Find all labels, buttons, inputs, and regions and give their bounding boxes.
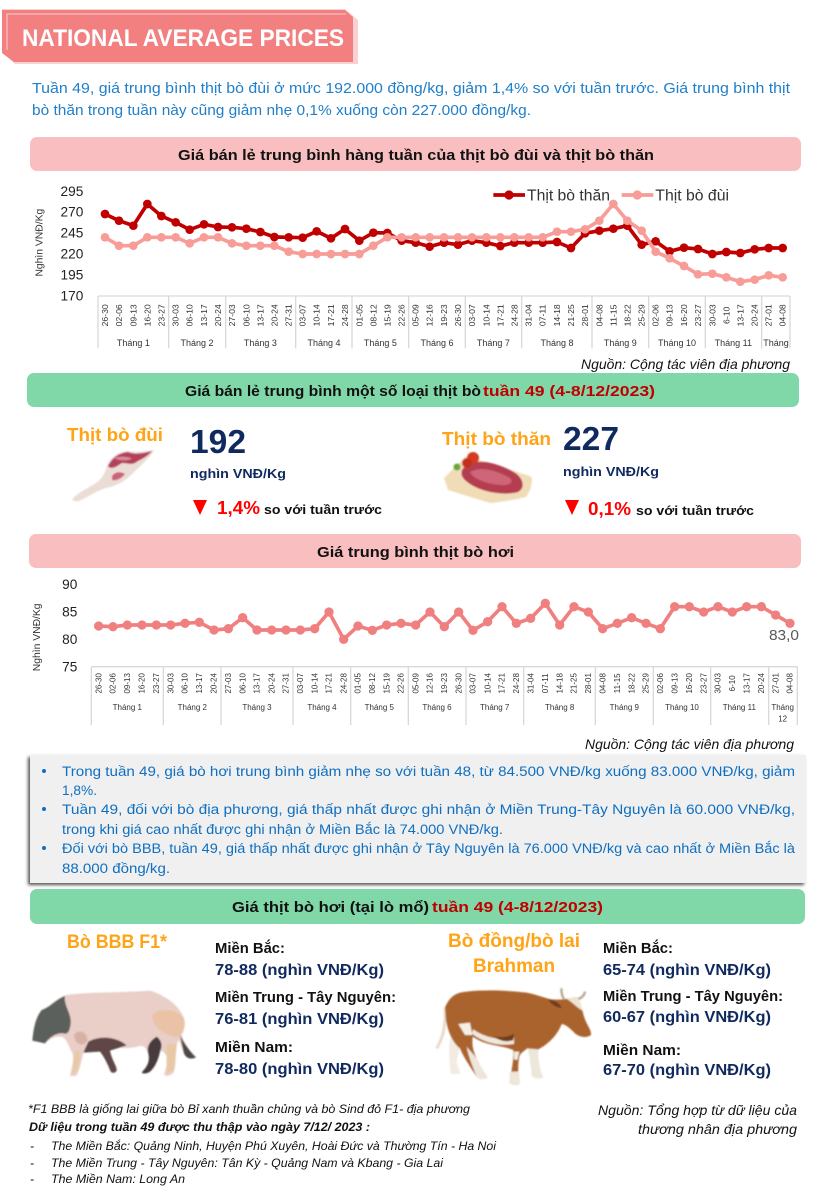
breed name <box>448 931 580 977</box>
week labels: 07-11 <box>538 304 548 326</box>
y axis values: 195 <box>61 268 84 283</box>
data label: last value: 83,0 <box>769 628 799 644</box>
month labels: 12 <box>778 715 788 724</box>
panel: thịt bò thăn price: 0,1% <box>588 499 631 519</box>
series: thịt bò thăn <box>105 204 783 254</box>
week labels <box>100 304 788 326</box>
intro text: Tuần 49, giá trung bình thịt bò đùi ở mức 192.000 đồng/kg, giảm 1,4% so với tuần trước. Giá trung bình thịt <box>32 81 790 97</box>
week labels: 15-19 <box>382 304 392 326</box>
week labels: 30-03 <box>707 304 717 326</box>
source note: live cattle chart: Nguồn: Cộng tác viên địa phương <box>585 736 794 752</box>
line chart: live cattle prices <box>32 577 799 725</box>
week labels: 23-27 <box>699 673 708 694</box>
month labels: Tháng <box>763 338 789 348</box>
week labels: 10-14 <box>312 304 322 326</box>
week labels: 09-13 <box>670 673 679 694</box>
icon: brown cow <box>437 988 591 1085</box>
week labels: 06-10 <box>241 304 251 326</box>
y axis values: 85 <box>62 605 78 620</box>
week labels: 30-03 <box>166 673 175 694</box>
panel: thịt bò thăn price <box>442 420 754 519</box>
heading: weekly retail price chart <box>30 137 801 171</box>
week labels: 03-07 <box>298 304 308 326</box>
week labels: 27-03 <box>224 673 233 694</box>
title banner: NATIONAL AVERAGE PRICES <box>22 25 344 52</box>
month labels: Tháng 1 <box>113 703 143 712</box>
region prices: Miền Trung - Tây Nguyên: <box>603 988 783 1005</box>
month labels: Tháng 2 <box>178 703 208 712</box>
month labels <box>117 338 789 348</box>
footnote: data notes: The Miền Trung - Tây Nguyên: Tân Kỳ - Quảng Nam và Kbang - Gia Lai <box>51 1156 443 1170</box>
source note: traders: thương nhân địa phương <box>638 1121 797 1137</box>
month labels: Tháng 8 <box>541 338 573 348</box>
unit: nghìn VNĐ/Kg <box>563 464 659 479</box>
week labels: 04-08 <box>598 673 607 694</box>
value: 227 <box>563 420 619 457</box>
bullet 1 <box>42 764 795 799</box>
week labels: 13-17 <box>255 304 265 326</box>
month labels: Tháng 5 <box>365 703 395 712</box>
week labels: 23-27 <box>693 304 703 326</box>
heading: live cattle at slaughterhouse week 49 <box>30 889 805 924</box>
week labels: 18-22 <box>627 673 636 694</box>
change <box>193 500 207 515</box>
region prices: Miền Bắc: <box>603 939 673 957</box>
week labels: 13-17 <box>735 304 745 326</box>
week labels: 05-09 <box>411 304 421 326</box>
series: live cattle price <box>99 603 790 639</box>
bullet 2 <box>42 802 795 838</box>
panel: local and Brahman cattle <box>437 931 783 1085</box>
week labels: 27-31 <box>282 673 291 694</box>
week labels: 02-06 <box>114 304 124 326</box>
week labels: 04-08 <box>786 673 795 694</box>
month labels: Tháng 3 <box>242 703 272 712</box>
week labels: 16-20 <box>138 673 147 694</box>
month labels: Tháng 11 <box>723 703 756 712</box>
breed name: Bò đồng/bò lai <box>448 931 580 952</box>
month labels: Tháng 9 <box>610 703 640 712</box>
month labels: Tháng 10 <box>665 703 699 712</box>
week labels: 26-30 <box>454 673 463 694</box>
breed name: Brahman <box>473 956 555 977</box>
week labels: 24-28 <box>339 673 348 694</box>
legend: Thịt bò đùi <box>655 187 729 204</box>
week labels <box>94 673 795 694</box>
heading: retail prices week 49: Giá bán lẻ trung bình một số loại thịt bò <box>185 383 481 400</box>
breed name: Bò BBB F1* <box>67 932 168 953</box>
week labels: 21-25 <box>566 304 576 326</box>
footnote: data notes: - <box>30 1172 34 1186</box>
week labels: 09-13 <box>128 304 138 326</box>
icon: BBB bull <box>32 991 196 1076</box>
heading: retail prices week 49: tuần 49 (4-8/12/2023) <box>483 383 655 400</box>
y axis title: Nghìn VNĐ/Kg <box>34 209 45 277</box>
region prices: Miền Nam: <box>215 1039 293 1056</box>
week labels: 10-14 <box>481 304 491 326</box>
week labels: 06-10 <box>185 304 195 326</box>
month labels: Tháng 5 <box>364 338 397 348</box>
week labels: 24-28 <box>512 673 521 694</box>
label: Thịt bò thăn <box>442 429 551 449</box>
week labels: 27-03 <box>227 304 237 326</box>
bullet 3: Đối với bò BBB, tuần 49, giá thấp nhất được ghi nhận ở Tây Nguyên là 76.000 VNĐ/kg và cao nhất ở Miền Bắc là <box>62 840 795 857</box>
week labels: 21-25 <box>570 673 579 694</box>
region prices: 60-67 (nghìn VNĐ/Kg) <box>603 1009 771 1026</box>
week labels: 14-18 <box>555 673 564 694</box>
week labels: 16-20 <box>685 673 694 694</box>
month labels: Tháng 3 <box>244 338 277 348</box>
month labels: Tháng 7 <box>477 338 510 348</box>
month labels: Tháng 4 <box>308 338 340 348</box>
intro text <box>32 81 790 119</box>
week labels: 03-07 <box>467 304 477 326</box>
region prices: 67-70 (nghìn VNĐ/Kg) <box>603 1062 771 1079</box>
week labels: 20-24 <box>757 673 766 694</box>
week labels: 13-17 <box>195 673 204 694</box>
bullet 1: 1,8%. <box>62 783 97 799</box>
y axis values: 270 <box>61 205 84 220</box>
label: Thịt bò đùi <box>67 425 163 445</box>
heading: weekly retail price chart: Giá bán lẻ trung bình hàng tuần của thịt bò đùi và thịt bò thăn <box>178 147 654 164</box>
y axis values <box>61 184 84 303</box>
week labels: 13-17 <box>199 304 209 326</box>
week labels: 11-15 <box>613 673 622 693</box>
week labels: 28-01 <box>580 304 590 326</box>
title banner <box>2 9 358 64</box>
intro text: bò thăn trong tuần này cũng giảm nhẹ 0,1% xuống còn 227.000 đồng/kg. <box>32 103 531 119</box>
week labels: 31-04 <box>526 673 535 694</box>
y axis values: 220 <box>61 247 84 262</box>
week labels: 6-10 <box>721 306 731 324</box>
week labels: 20-24 <box>269 304 279 326</box>
month labels: Tháng 2 <box>181 338 213 348</box>
month labels: Tháng 10 <box>658 338 696 348</box>
bullet 1: Trong tuần 49, giá bò hơi trung bình giảm nhẹ so với tuần 48, từ 84.500 VNĐ/kg xuống 83.000 VNĐ/kg, giảm <box>62 764 795 780</box>
panel: thịt bò thăn price: so với tuần trước <box>636 503 754 518</box>
week labels: 22-26 <box>397 304 407 326</box>
heading: live cattle price chart <box>29 534 801 568</box>
week labels: 16-20 <box>679 304 689 326</box>
month labels: Tháng 4 <box>307 703 337 712</box>
y axis title: Nghìn VNĐ/Kg <box>32 603 43 671</box>
source note: traders <box>598 1102 797 1137</box>
legend <box>493 187 729 204</box>
week labels: 02-06 <box>656 673 665 694</box>
week labels: 23-27 <box>152 673 161 694</box>
source note: traders: Nguồn: Tổng hợp từ dữ liệu của <box>598 1102 797 1118</box>
footnote: data notes: - <box>30 1156 34 1170</box>
change <box>565 500 579 515</box>
week labels: 25-29 <box>642 673 651 694</box>
week labels: 20-24 <box>267 673 276 694</box>
week labels: 16-20 <box>142 304 152 326</box>
week labels: 31-04 <box>524 304 534 326</box>
week labels: 17-21 <box>498 673 507 694</box>
month labels: Tháng 11 <box>715 338 752 348</box>
week labels: 05-09 <box>411 673 420 694</box>
y axis values: 80 <box>62 632 78 647</box>
month labels: Tháng 9 <box>604 338 637 348</box>
footnote: data notes: The Miền Bắc: Quảng Ninh, Huyện Phú Xuyên, Hoài Đức và Thường Tín - Ha Noi <box>51 1138 496 1153</box>
bullet 2: Tuần 49, đối với bò địa phương, giá thấp nhất được ghi nhận ở Miền Trung-Tây Nguyên là 60.000 VNĐ/kg, <box>62 802 795 818</box>
week labels: 06-10 <box>181 673 190 694</box>
icon: beef leg <box>73 450 154 501</box>
series: thịt bò đùi <box>105 204 783 282</box>
week labels: 01-05 <box>354 304 364 326</box>
y axis values: 170 <box>61 288 84 303</box>
week labels: 12-16 <box>425 304 435 326</box>
week labels: 06-10 <box>238 673 247 694</box>
bullet 3: 88.000 đồng/kg. <box>62 861 170 877</box>
month labels: Tháng 1 <box>117 338 150 348</box>
y axis values: 245 <box>61 226 84 241</box>
month labels: Tháng <box>771 703 794 712</box>
week labels: 08-12 <box>368 673 377 694</box>
panel: BBB F1 cattle <box>32 932 396 1078</box>
week labels: 11-15 <box>608 304 618 326</box>
week labels: 20-24 <box>750 304 760 326</box>
week labels: 18-22 <box>622 304 632 326</box>
week labels: 01-05 <box>354 673 363 694</box>
source note: retail chart: Nguồn: Cộng tác viên địa phương <box>581 356 790 372</box>
week labels: 17-21 <box>326 304 336 326</box>
region prices: Miền Bắc: <box>215 939 285 957</box>
y axis values: 75 <box>62 659 78 674</box>
week labels: 03-07 <box>296 673 305 694</box>
bullet 2: trong khi giá cao nhất được ghi nhận ở Miền Bắc là 74.000 VNĐ/kg. <box>62 821 503 838</box>
week labels: 26-30 <box>94 673 103 694</box>
week labels: 09-13 <box>665 304 675 326</box>
category axis <box>98 296 790 348</box>
panel: thịt bò đùi price <box>67 423 382 518</box>
week labels: 15-19 <box>382 673 391 694</box>
y axis values <box>62 577 78 674</box>
y axis values: 295 <box>61 184 84 199</box>
month labels: Tháng 7 <box>480 703 510 712</box>
week labels: 03-07 <box>469 673 478 694</box>
region prices: Miền Trung - Tây Nguyên: <box>215 989 396 1006</box>
week labels: 30-03 <box>171 304 181 326</box>
region prices: 65-74 (nghìn VNĐ/Kg) <box>603 962 771 979</box>
region prices: Miền Nam: <box>603 1042 681 1059</box>
week labels: 12-16 <box>426 673 435 694</box>
value: 192 <box>190 423 246 460</box>
region prices <box>603 939 783 1079</box>
region prices: 76-81 (nghìn VNĐ/Kg) <box>215 1011 384 1028</box>
week labels: 07-11 <box>541 673 550 693</box>
week labels: 26-30 <box>453 304 463 326</box>
footnote: data notes: *F1 BBB là giống lai giữa bò Bỉ xanh thuần chủng và bò Sind đỏ F1- địa phương <box>28 1102 470 1116</box>
y axis values: 90 <box>62 577 78 592</box>
region prices <box>215 939 396 1078</box>
week labels: 17-21 <box>495 304 505 326</box>
week labels: 20-24 <box>210 673 219 694</box>
week labels: 26-30 <box>100 304 110 326</box>
month labels: Tháng 6 <box>422 703 452 712</box>
week labels: 22-26 <box>397 673 406 694</box>
week labels: 13-17 <box>742 673 751 694</box>
line chart: retail beef prices <box>34 184 790 348</box>
unit: nghìn VNĐ/Kg <box>190 466 286 481</box>
week labels: 27-31 <box>284 304 294 326</box>
week labels: 24-28 <box>509 304 519 326</box>
week labels: 08-12 <box>368 304 378 326</box>
week labels: 09-13 <box>123 673 132 694</box>
week labels: 04-08 <box>778 304 788 326</box>
panel: live cattle commentary <box>30 755 806 883</box>
week labels: 10-14 <box>310 673 319 694</box>
footnote: data notes: - <box>30 1139 34 1153</box>
week labels: 30-03 <box>714 673 723 694</box>
month labels <box>113 703 794 724</box>
heading: live cattle at slaughterhouse week 49: Giá thịt bò hơi (tại lò mổ) <box>232 899 429 916</box>
icon: steak on board <box>444 452 532 503</box>
footnote: data notes: Dữ liệu trong tuần 49 được thu thập vào ngày 7/12/ 2023 : <box>29 1120 370 1134</box>
week labels: 14-18 <box>552 304 562 326</box>
week labels: 20-24 <box>213 304 223 326</box>
week labels: 02-06 <box>651 304 661 326</box>
week labels: 25-29 <box>637 304 647 326</box>
bullet 3 <box>42 840 795 877</box>
week labels: 19-23 <box>440 673 449 694</box>
region prices: 78-80 (nghìn VNĐ/Kg) <box>215 1061 384 1078</box>
panel: thịt bò đùi price: so với tuần trước <box>264 502 382 517</box>
category axis <box>91 667 797 725</box>
week labels: 02-06 <box>109 673 118 694</box>
week labels: 24-28 <box>340 304 350 326</box>
week labels: 13-17 <box>253 673 262 694</box>
month labels: Tháng 6 <box>421 338 453 348</box>
legend: Thịt bò thăn <box>527 187 610 204</box>
footnote: data notes <box>28 1102 496 1186</box>
week labels: 28-01 <box>584 673 593 694</box>
panel: thịt bò đùi price: 1,4% <box>217 498 260 518</box>
week labels: 10-14 <box>483 673 492 694</box>
week labels: 17-21 <box>325 673 334 694</box>
footnote: data notes: The Miền Nam: Long An <box>51 1172 185 1186</box>
week labels: 19-23 <box>439 304 449 326</box>
week labels: 6-10 <box>728 675 737 691</box>
month labels: Tháng 8 <box>545 703 575 712</box>
week labels: 27-01 <box>764 304 774 326</box>
week labels: 04-08 <box>594 304 604 326</box>
week labels: 23-27 <box>156 304 166 326</box>
heading: retail prices week 49 <box>27 373 799 407</box>
region prices: 78-88 (nghìn VNĐ/Kg) <box>215 962 384 979</box>
heading: live cattle at slaughterhouse week 49: tuần 49 (4-8/12/2023) <box>432 899 603 916</box>
week labels: 27-01 <box>771 673 780 694</box>
heading: live cattle price chart: Giá trung bình thịt bò hơi <box>317 544 514 561</box>
